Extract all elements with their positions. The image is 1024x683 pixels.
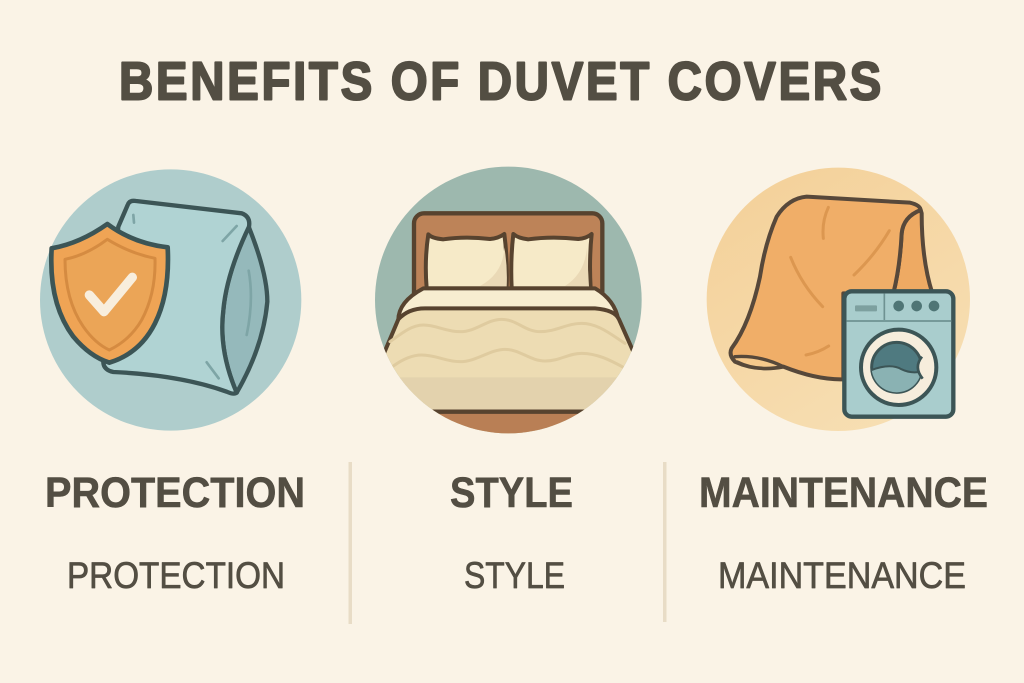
panel: maintenance icon <box>707 168 970 431</box>
panel: protection icon <box>40 169 301 431</box>
panel: style icon <box>365 167 652 440</box>
divider <box>348 462 352 624</box>
text: maintenance: MAINTENANCE <box>718 555 966 596</box>
heading: protection: PROTECTION <box>45 469 305 517</box>
heading: maintenance: MAINTENANCE <box>699 469 988 517</box>
text: protection: PROTECTION <box>67 555 285 596</box>
icon: bed <box>384 211 634 434</box>
icon: pillow <box>103 201 267 394</box>
icon: draped duvet <box>731 197 932 379</box>
title: BENEFITS OF DUVET COVERS <box>119 52 884 112</box>
icon: washing machine <box>844 291 953 417</box>
text: style: STYLE <box>464 555 565 596</box>
divider <box>663 462 666 622</box>
icon: shield with check <box>51 224 168 363</box>
heading: style: STYLE <box>450 469 573 517</box>
